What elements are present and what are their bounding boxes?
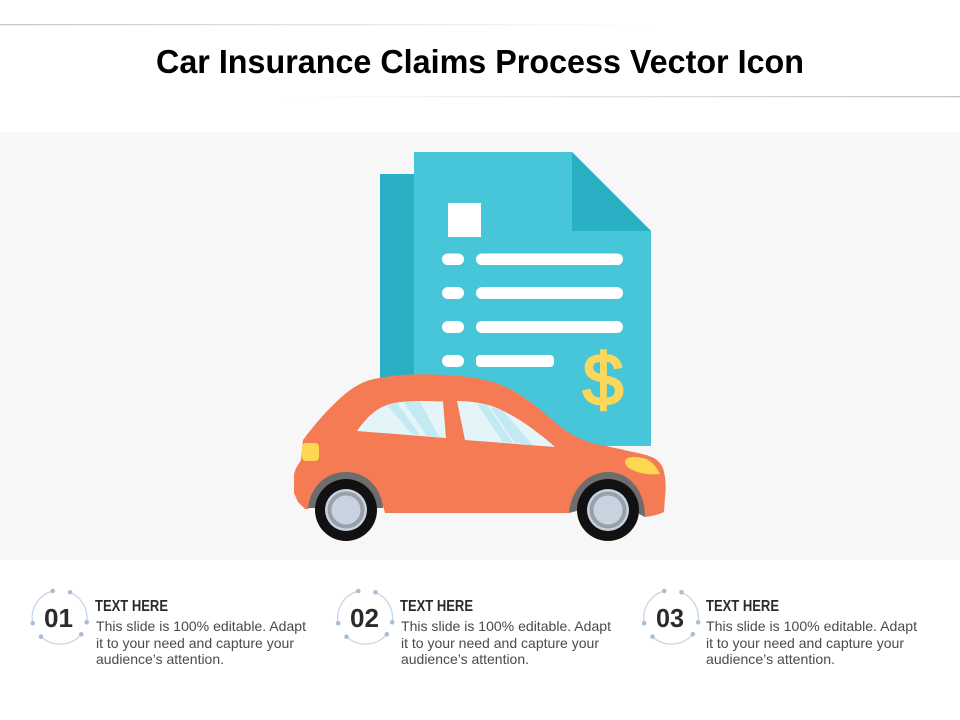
back sheet [380,174,440,414]
heading 03: TEXT HERE [706,598,779,615]
panel: illustration background [0,132,960,560]
ring icon 01 [30,589,89,644]
page fold [572,152,651,231]
heading 01: TEXT HERE [95,598,168,615]
icon: car [294,374,666,541]
body 01: This slide is 100% editable. Adapt [96,619,306,634]
headlight [625,457,660,474]
photo square [448,203,481,237]
callout 01 [30,589,306,667]
callout 02 [336,589,611,667]
body 02 [401,619,611,667]
number 01: 01 [44,603,73,633]
rear window [357,401,446,438]
ring icon 03 [642,589,700,644]
number 03: 03 [656,603,684,633]
ring icon 02 [336,589,394,644]
body 02: it to your need and capture your [401,636,599,651]
number 02: 02 [350,603,379,633]
rear lamp [302,443,319,461]
callout 03 [642,589,917,667]
body 02: audience’s attention. [401,652,529,667]
car body [294,374,666,517]
body 03: audience’s attention. [706,652,835,667]
title: Car Insurance Claims Process Vector Icon [156,43,804,80]
body 01: audience’s attention. [96,652,224,667]
body 03: This slide is 100% editable. Adapt [706,619,917,634]
body 02: This slide is 100% editable. Adapt [401,619,611,634]
front sheet [414,152,651,446]
icon: insurance document [380,152,651,446]
heading 02: TEXT HERE [400,598,473,615]
front window [457,401,555,447]
front window reflections [477,404,533,445]
body 01: it to your need and capture your [96,636,294,651]
front wheel [569,472,645,541]
rear wheel [308,472,383,541]
text rows [442,254,623,367]
body 01 [96,619,306,667]
body 03: it to your need and capture your [706,636,904,651]
dollar sign: $ [583,340,623,421]
body 03 [706,619,917,667]
rear window reflections [387,402,439,437]
